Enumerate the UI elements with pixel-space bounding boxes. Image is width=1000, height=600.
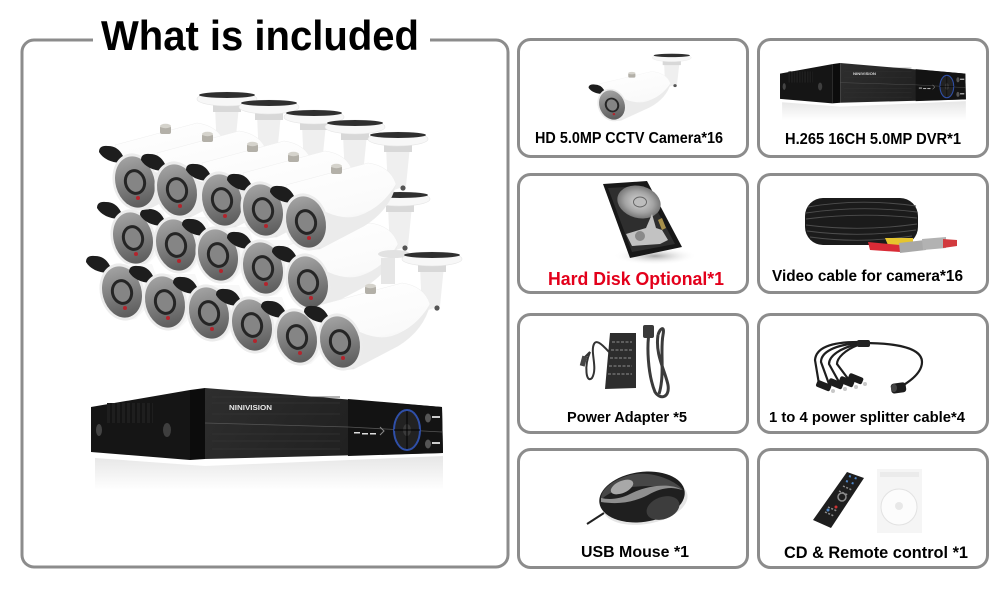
- icon: CD in plastic sleeve: [877, 469, 922, 533]
- icon: coiled video cable: [805, 198, 957, 253]
- icon: 1 to 4 splitter cable: [815, 340, 922, 394]
- panel: CD and remote: [758, 450, 988, 568]
- icon: hard disk drive: [603, 181, 697, 265]
- label: H.265 16CH 5.0MP DVR*1: [785, 131, 961, 148]
- icon: DVR recorder: NINIVISION: [853, 71, 876, 76]
- icon: power adapter with cords: [580, 325, 668, 397]
- panel: hard disk: [518, 174, 748, 292]
- label: CD & Remote control *1: [784, 544, 968, 562]
- image: large DVR recorder: [91, 388, 443, 490]
- icon: remote control: [813, 472, 864, 528]
- icon: USB mouse: [587, 466, 691, 531]
- icon: bullet camera: [589, 54, 691, 124]
- panel: DVR: [758, 40, 988, 156]
- image: large DVR recorder: NINIVISION: [229, 403, 272, 412]
- label: Video cable for camera*16: [772, 268, 963, 285]
- label: 1 to 4 power splitter cable*4: [769, 409, 966, 426]
- icon: DVR recorder: [780, 63, 966, 120]
- panel: USB mouse: [518, 450, 748, 568]
- panel: HD camera: [518, 40, 748, 156]
- label: HD 5.0MP CCTV Camera*16: [535, 130, 723, 147]
- label: Power Adapter *5: [567, 410, 687, 426]
- label: Hard Disk Optional*1: [548, 269, 724, 289]
- panel: power adapter: [518, 314, 748, 432]
- label: USB Mouse *1: [581, 544, 689, 561]
- panel: what is included: [22, 12, 508, 567]
- image: sixteen bullet cameras: [86, 92, 462, 376]
- panel: power splitter: [758, 314, 988, 432]
- panel: video cable: [758, 174, 988, 292]
- title: What is included: [101, 12, 419, 59]
